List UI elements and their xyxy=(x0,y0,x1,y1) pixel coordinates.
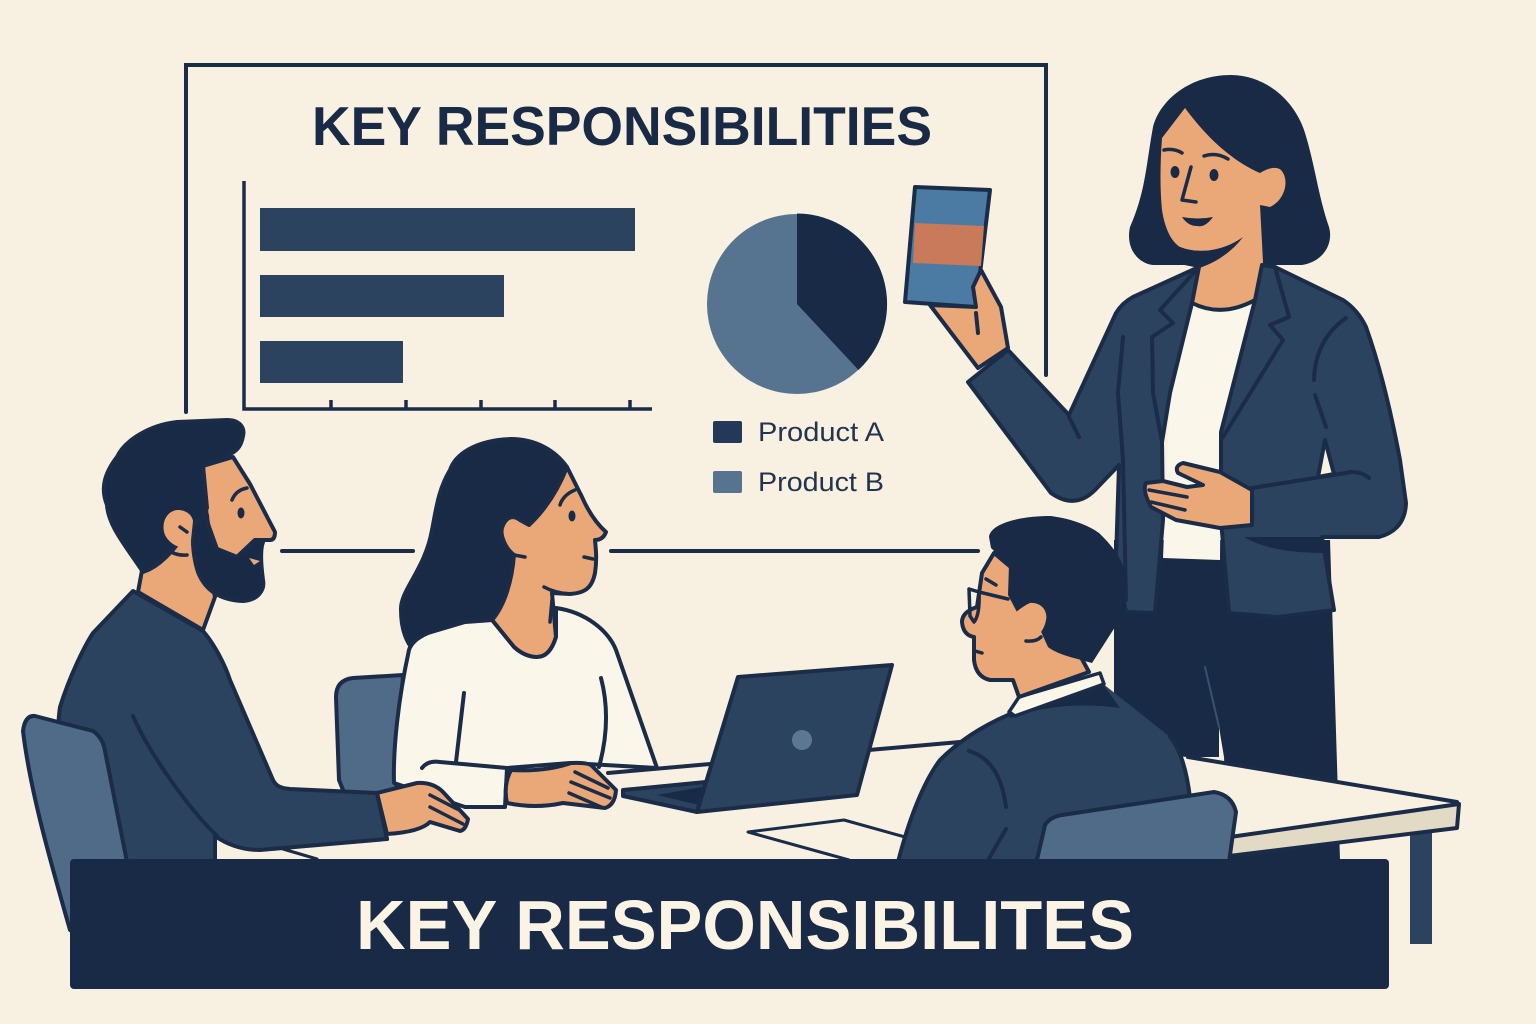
man cuff xyxy=(377,793,387,839)
table leg xyxy=(1410,832,1432,944)
glasses man collar xyxy=(1009,673,1104,716)
glasses man chair xyxy=(1036,792,1236,864)
presenter trousers xyxy=(1114,540,1340,860)
woman hand xyxy=(506,763,616,808)
legend xyxy=(713,417,884,497)
legend: Product A xyxy=(758,417,884,447)
paper on table xyxy=(748,820,905,860)
glasses and facial details xyxy=(969,579,1041,653)
presenter shirt xyxy=(1163,300,1255,560)
figure: seated man with beard xyxy=(23,420,468,930)
legend: Product B xyxy=(758,467,884,497)
presenter sleeve gap xyxy=(1318,440,1334,477)
figure: presenter xyxy=(905,75,1406,860)
presenter jaw shadow xyxy=(1170,237,1243,268)
glasses man upper back xyxy=(1010,680,1120,718)
banner title: KEY RESPONSIBILITES xyxy=(356,886,1134,964)
pie chart xyxy=(707,214,887,394)
glasses man face xyxy=(962,553,1089,697)
man hand xyxy=(377,783,468,834)
table top xyxy=(283,742,1457,860)
man sleeve seam xyxy=(133,716,217,836)
glasses man body xyxy=(898,683,1192,862)
woman top xyxy=(394,608,657,807)
presenter eyes and mouth xyxy=(1164,149,1228,226)
presenter card xyxy=(905,187,990,307)
woman hair xyxy=(401,439,567,647)
panel: presentation board xyxy=(186,65,1046,551)
presenter trouser crease xyxy=(1205,667,1219,727)
presenter jacket left xyxy=(968,267,1199,613)
man chair xyxy=(23,716,127,930)
bar chart xyxy=(244,181,652,409)
man neck xyxy=(138,530,215,630)
glasses man hair xyxy=(989,516,1126,663)
man body xyxy=(58,591,387,862)
laptop xyxy=(623,665,892,812)
man face xyxy=(203,457,275,557)
man facial details xyxy=(167,488,247,555)
presenter hair xyxy=(1129,75,1330,265)
banner xyxy=(70,859,1389,989)
presenter sleeve shadow xyxy=(1244,537,1326,553)
woman neck and face xyxy=(492,467,606,657)
man beard xyxy=(193,515,263,601)
heading: board title: KEY RESPONSIBILITIES xyxy=(312,95,932,157)
presenter face xyxy=(1160,108,1260,251)
man mouth xyxy=(249,558,260,565)
presenter neck xyxy=(1192,205,1263,308)
man hair xyxy=(104,420,243,572)
glasses man ear xyxy=(1016,603,1046,641)
presenter ear xyxy=(1260,168,1285,207)
figure: seated woman xyxy=(336,439,657,808)
figure: man with glasses xyxy=(898,516,1236,864)
table xyxy=(283,742,1459,944)
presenter lapels and seams xyxy=(1069,267,1369,600)
woman chair xyxy=(336,675,403,795)
table edge xyxy=(1229,804,1459,856)
presenter jacket right xyxy=(1221,265,1406,617)
woman facial details xyxy=(514,490,593,622)
presenter hand on jacket xyxy=(1145,463,1252,528)
man ear xyxy=(163,510,193,550)
presenter raised hand xyxy=(930,270,1008,368)
